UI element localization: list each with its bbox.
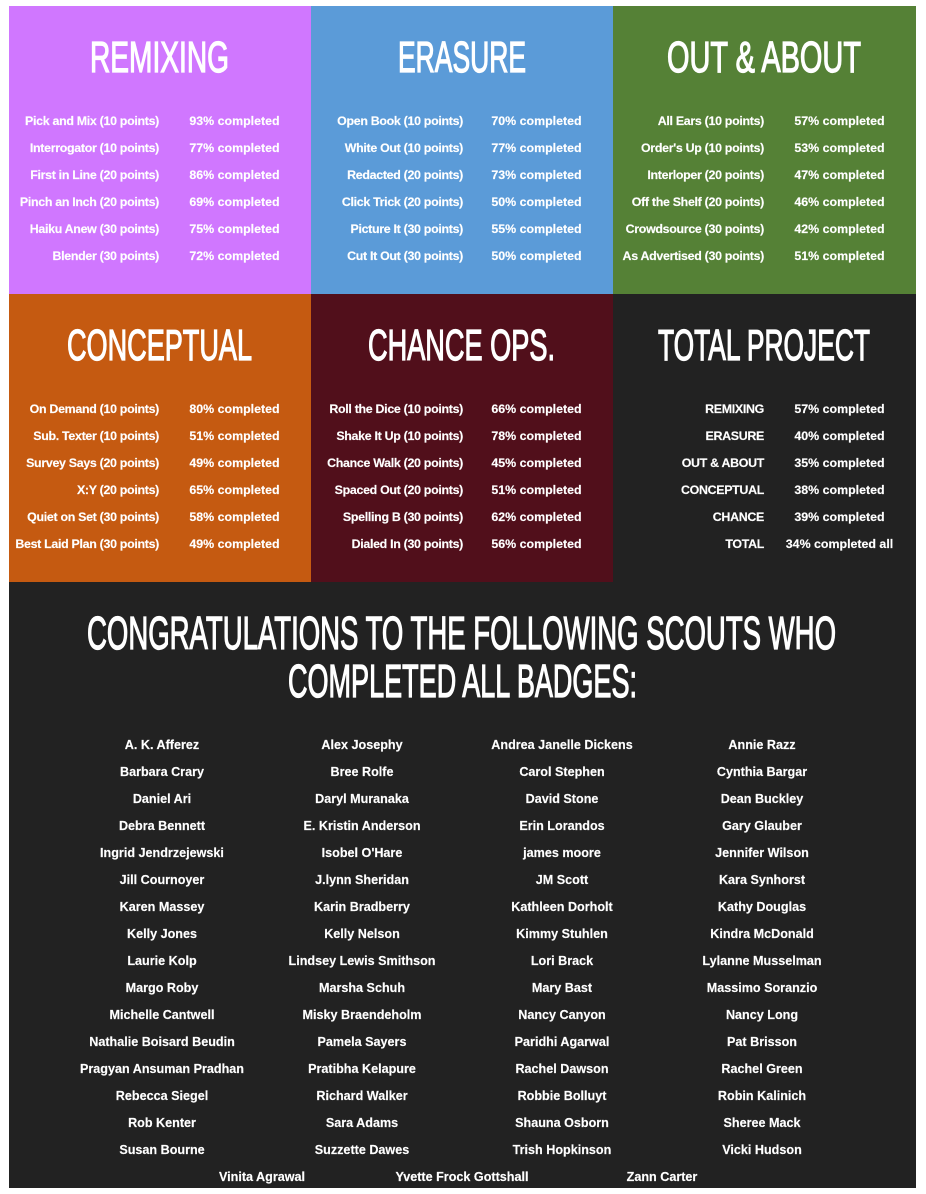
badge list: erasure: 73% completed [491,168,582,182]
names list: Carol Stephen [519,765,605,779]
badge list: conceptual: Quiet on Set (30 points) [27,510,159,524]
badge list: erasure: 50% completed [491,195,582,209]
names list: Kindra McDonald [710,927,814,941]
names list: Mary Bast [532,981,593,995]
totals list: CONCEPTUAL [681,483,765,497]
names list: Annie Razz [728,738,796,752]
badge list: out and about: 46% completed [794,195,885,209]
badge list: remixing: 69% completed [189,195,280,209]
badge list: conceptual: On Demand (10 points) [30,402,159,416]
names list: Nancy Long [726,1008,798,1022]
panel: out and about [613,6,916,294]
names list: Rebecca Siegel [116,1089,208,1103]
panel: remixing [9,6,311,294]
badge list: chance ops: Chance Walk (20 points) [327,456,463,470]
totals list: OUT & ABOUT [682,456,765,470]
badge list: conceptual: Sub. Texter (10 points) [33,429,159,443]
names list: Isobel O'Hare [322,846,402,860]
names list: Daniel Ari [133,792,191,806]
names list: Rob Kenter [128,1116,196,1130]
totals list: 35% completed [794,456,885,470]
panel: chance ops [311,294,613,582]
names list: Nancy Canyon [518,1008,606,1022]
names list: Lori Brack [531,954,594,968]
badge list: erasure: Picture It (30 points) [350,222,463,236]
names list: Kelly Jones [127,927,197,941]
badge list: erasure: 77% completed [491,141,582,155]
badge list: chance ops: 51% completed [491,483,582,497]
names list: Yvette Frock Gottshall [396,1170,528,1184]
names list: Shauna Osborn [515,1116,609,1130]
names list: Robin Kalinich [718,1089,806,1103]
names list: Pratibha Kelapure [308,1062,416,1076]
badge list: remixing: 72% completed [189,249,280,263]
badge list: remixing: Interrogator (10 points) [30,141,159,155]
badge list: erasure: 55% completed [491,222,582,236]
names list: Erin Lorandos [519,819,605,833]
totals list: 40% completed [794,429,885,443]
names list: JM Scott [536,873,589,887]
names list: A. K. Afferez [125,738,199,752]
badge list: chance ops: 62% completed [491,510,582,524]
names list: Sara Adams [326,1116,398,1130]
badge list: erasure: White Out (10 points) [345,141,463,155]
names list: Kelly Nelson [324,927,400,941]
names list: james moore [522,846,601,860]
badge list: out and about: 53% completed [794,141,885,155]
names list: Karin Bradberry [314,900,410,914]
badge list: chance ops: Spelling B (30 points) [343,510,463,524]
names list: Misky Braendeholm [303,1008,421,1022]
names list: Nathalie Boisard Beudin [89,1035,235,1049]
names list: Kimmy Stuhlen [516,927,608,941]
badge list: remixing: Pick and Mix (10 points) [25,114,159,128]
badge list: chance ops: Roll the Dice (10 points) [329,402,463,416]
names list: Pamela Sayers [318,1035,406,1049]
heading: erasure: ERASURE [398,33,526,82]
badge list: remixing: 86% completed [189,168,280,182]
badge list: erasure: Click Trick (20 points) [342,195,463,209]
badge list: conceptual: 51% completed [189,429,280,443]
names list: Daryl Muranaka [315,792,410,806]
badge list: out and about: Interloper (20 points) [647,168,764,182]
badge list: conceptual: X:Y (20 points) [77,483,159,497]
names list: Kara Synhorst [719,873,806,887]
badge list: erasure [337,114,582,263]
badge list: out and about: 57% completed [794,114,885,128]
names list: Cynthia Bargar [717,765,807,779]
names list: Jill Cournoyer [120,873,204,887]
badge list: conceptual: Best Laid Plan (30 points) [15,537,159,551]
badge list: chance ops [327,402,582,551]
badge list: chance ops: 78% completed [491,429,582,443]
badge list: remixing: 93% completed [189,114,280,128]
badge list: conceptual [15,402,280,551]
badge list: erasure: 50% completed [491,249,582,263]
badge list: erasure: Redacted (20 points) [347,168,463,182]
names list: Debra Bennett [119,819,206,833]
names list: Laurie Kolp [127,954,197,968]
badge list: erasure: Open Book (10 points) [337,114,463,128]
names list: Rachel Green [721,1062,803,1076]
badge list: remixing [20,114,280,263]
names list: Zann Carter [627,1170,697,1184]
names list: Marsha Schuh [319,981,405,995]
names list: Sheree Mack [723,1116,801,1130]
names list: Trish Hopkinson [513,1143,611,1157]
totals list [681,402,893,551]
badge list: remixing: 77% completed [189,141,280,155]
badge list: out and about: 47% completed [794,168,885,182]
totals list: CHANCE [713,510,764,524]
names list: Rachel Dawson [515,1062,609,1076]
heading: congratulations: COMPLETED ALL BADGES: [288,655,637,707]
totals list: TOTAL [725,537,765,551]
badge list: remixing: Blender (30 points) [52,249,159,263]
names list: Massimo Soranzio [707,981,818,995]
names list: Bree Rolfe [330,765,394,779]
badge list: conceptual: 49% completed [189,537,280,551]
names list: Robbie Bolluyt [518,1089,607,1103]
badge list: chance ops: 66% completed [491,402,582,416]
heading: congratulations [87,607,836,707]
badge list: erasure: 70% completed [491,114,582,128]
badge list: conceptual: 49% completed [189,456,280,470]
names list: Karen Massey [120,900,204,914]
names list: Kathy Douglas [718,900,806,914]
names list: Vinita Agrawal [219,1170,305,1184]
names list: Dean Buckley [721,792,803,806]
names list: Jennifer Wilson [715,846,809,860]
badge list: out and about: All Ears (10 points) [658,114,764,128]
badge list: erasure: Cut It Out (30 points) [347,249,463,263]
heading: remixing: REMIXING [90,33,229,82]
badge list: out and about: As Advertised (30 points) [623,249,764,263]
badge list: out and about: 42% completed [794,222,885,236]
badge list: chance ops: Dialed In (30 points) [352,537,463,551]
badge list: out and about: Crowdsource (30 points) [626,222,764,236]
panel: conceptual [9,294,311,582]
panel: congratulations [9,582,916,1188]
badge list: chance ops: 56% completed [491,537,582,551]
badge list: conceptual: 58% completed [189,510,280,524]
names list: Kathleen Dorholt [511,900,614,914]
badge list: out and about: Order's Up (10 points) [641,141,764,155]
names list: Barbara Crary [120,765,204,779]
heading: conceptual: CONCEPTUAL [67,321,252,370]
names list [80,738,822,1184]
names list: Alex Josephy [321,738,403,752]
badge list: out and about [623,114,885,263]
totals list: REMIXING [705,402,764,416]
names list: Lindsey Lewis Smithson [289,954,435,968]
badge list: out and about: Off the Shelf (20 points) [632,195,764,209]
names list: Ingrid Jendrzejewski [100,846,224,860]
badge list: remixing: Haiku Anew (30 points) [30,222,159,236]
names list: Paridhi Agarwal [515,1035,609,1049]
panel: total project [613,294,916,582]
badge list: conceptual: 65% completed [189,483,280,497]
badge list: remixing: 75% completed [189,222,280,236]
badge list: remixing: Pinch an Inch (20 points) [20,195,159,209]
totals list: 57% completed [794,402,885,416]
names list: E. Kristin Anderson [303,819,421,833]
badge list: out and about: 51% completed [794,249,885,263]
names list: Richard Walker [316,1089,408,1103]
badge list: chance ops: Spaced Out (20 points) [335,483,463,497]
names list: Gary Glauber [722,819,802,833]
heading: chance ops: CHANCE OPS. [368,321,555,370]
names list: Andrea Janelle Dickens [491,738,633,752]
badge list: remixing: First in Line (20 points) [30,168,159,182]
names list: Pat Brisson [727,1035,797,1049]
panel: erasure [311,6,613,294]
names list: Margo Roby [126,981,198,995]
names list: Lylanne Musselman [702,954,822,968]
names list: Pragyan Ansuman Pradhan [80,1062,244,1076]
totals list: 39% completed [794,510,885,524]
totals list: ERASURE [706,429,764,443]
totals list: 38% completed [794,483,885,497]
badge list: conceptual: 80% completed [189,402,280,416]
totals list: 34% completed all [786,537,893,551]
names list: Michelle Cantwell [110,1008,214,1022]
badge list: conceptual: Survey Says (20 points) [26,456,159,470]
names list: Suzzette Dawes [315,1143,409,1157]
names list: Susan Bourne [119,1143,205,1157]
names list: J.lynn Sheridan [315,873,409,887]
badge list: chance ops: 45% completed [491,456,582,470]
names list: Vicki Hudson [722,1143,802,1157]
badge list: chance ops: Shake It Up (10 points) [336,429,463,443]
names list: David Stone [526,792,598,806]
